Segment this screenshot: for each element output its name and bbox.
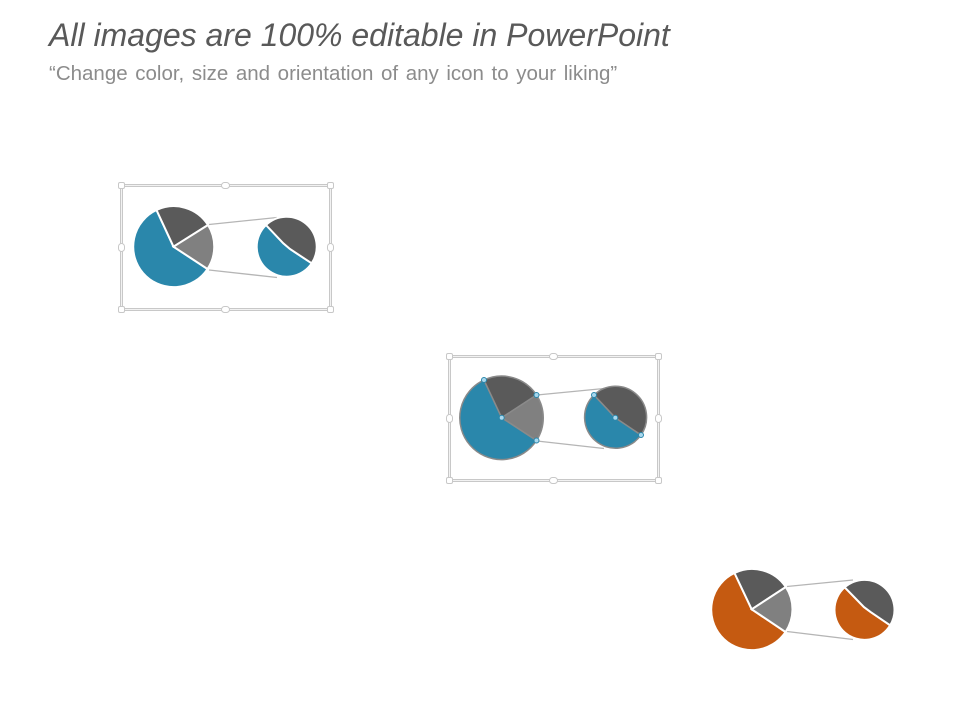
edit points (482, 378, 644, 443)
connector lines (787, 580, 853, 640)
large pie (460, 376, 543, 460)
title: All images are 100% editable in PowerPoint (47, 17, 671, 53)
small pie (585, 386, 647, 448)
subtitle: “Change color, size and orientation of any icon to your liking” (49, 62, 617, 85)
connector lines (537, 388, 604, 448)
selection frame (446, 354, 662, 484)
connector lines (209, 218, 277, 278)
panel: blue pie-of-pie chart in selection frame (118, 182, 334, 312)
panel: orange pie-of-pie chart (711, 569, 894, 650)
selection frame (118, 182, 334, 312)
large pie (133, 206, 214, 287)
panel: blue pie-of-pie chart with edit points (446, 354, 662, 484)
small pie (257, 217, 317, 277)
small pie (834, 580, 894, 640)
large pie (711, 569, 792, 650)
